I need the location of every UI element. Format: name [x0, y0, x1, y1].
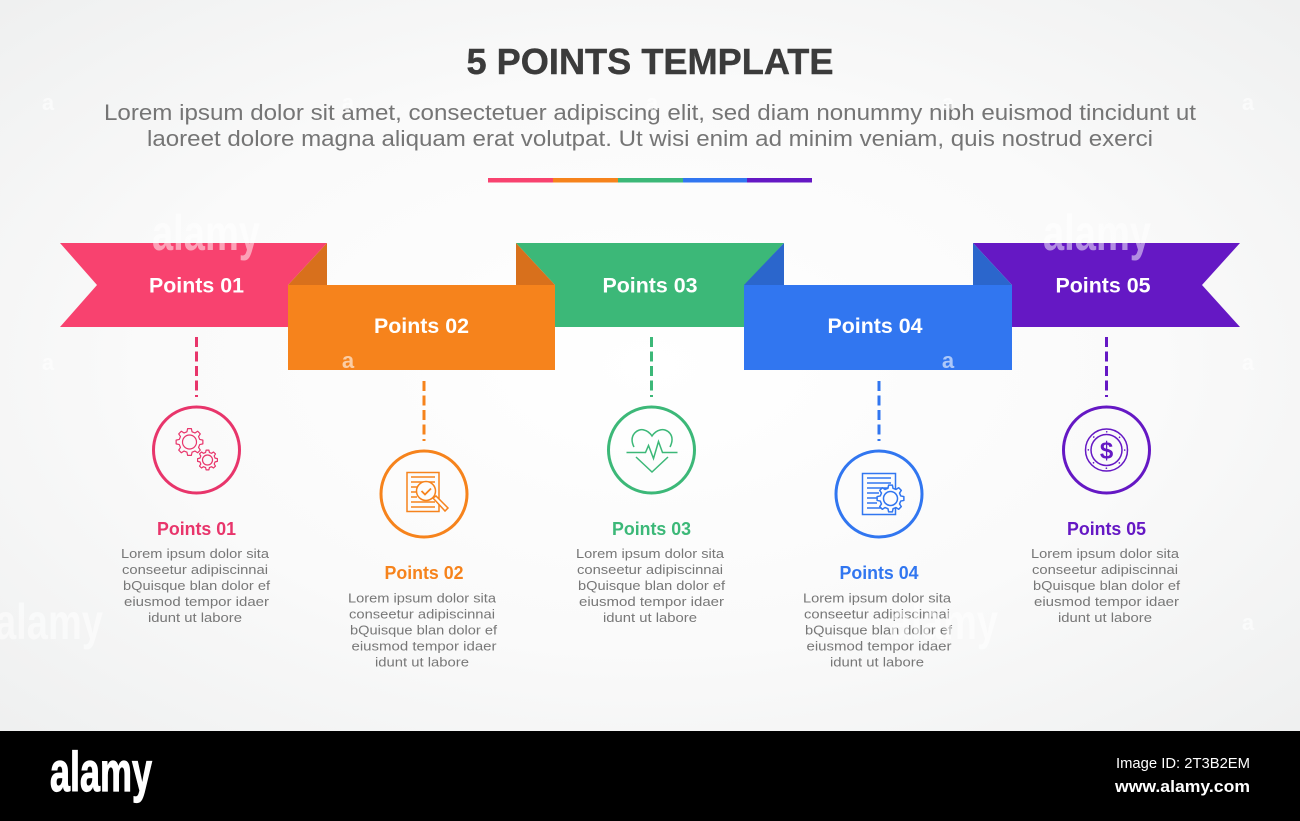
watermarks: a — [342, 90, 355, 115]
icon: document with magnifier — [407, 472, 448, 512]
fold 1-2 — [288, 243, 327, 285]
intro text: Lorem ipsum dolor sit amet, consectetuer adipiscing elit, sed diam nonummy nibh euismod tincidunt ut — [104, 100, 1196, 125]
ribbon label 2: Points 02 — [374, 315, 469, 338]
connector 1 — [195, 337, 198, 397]
text 1: Lorem ipsum dolor sita — [121, 546, 270, 561]
watermarks: a — [342, 348, 355, 373]
text 1: eiusmod tempor idaer — [124, 594, 270, 609]
heading 3: Points 03 — [612, 519, 691, 539]
ribbon banner — [60, 243, 1240, 370]
fold 2-3 — [516, 243, 555, 285]
column 5 — [1031, 337, 1180, 625]
text 3: bQuisque blan dolor ef — [578, 578, 725, 593]
text 3: Lorem ipsum dolor sita — [576, 546, 725, 561]
ribbon 5 — [973, 243, 1240, 327]
footer bar — [0, 731, 1300, 821]
icon: document with gear — [862, 474, 904, 514]
ribbon 2 — [288, 285, 555, 370]
title: 5 POINTS TEMPLATE — [466, 41, 834, 82]
circle 4 — [836, 451, 922, 537]
fold 4-5 — [973, 243, 1012, 285]
watermarks: a — [42, 90, 55, 115]
watermarks: a — [942, 348, 955, 373]
text 2: bQuisque blan dolor ef — [350, 622, 497, 638]
watermarks: alamy — [890, 594, 998, 650]
watermarks: a — [1242, 350, 1255, 375]
icon: gears — [176, 429, 217, 470]
text 5: Lorem ipsum dolor sita — [1031, 546, 1180, 561]
text 5 — [1031, 546, 1180, 625]
text 5: conseetur adipiscinnai — [1032, 562, 1178, 577]
text 4: conseetur adipiscinnai — [804, 606, 950, 622]
watermarks: a — [1242, 610, 1255, 635]
text 3: eiusmod tempor idaer — [579, 594, 725, 609]
text 1: idunt ut labore — [148, 610, 242, 625]
watermarks: a — [942, 90, 955, 115]
text 5: bQuisque blan dolor ef — [1033, 578, 1180, 593]
ribbon label 5: Points 05 — [1056, 274, 1151, 298]
text 4: bQuisque blan dolor ef — [805, 622, 952, 638]
column 1 — [121, 337, 270, 625]
watermarks: a — [1242, 90, 1255, 115]
ribbon label 1: Points 01 — [149, 274, 244, 298]
text 2 — [348, 590, 497, 670]
heading 5: Points 05 — [1067, 519, 1146, 539]
watermarks: alamy — [152, 205, 260, 261]
colour divider — [488, 178, 812, 182]
text 3 — [576, 546, 725, 625]
heading 1: Points 01 — [157, 519, 236, 539]
ribbon label 3: Points 03 — [602, 274, 698, 298]
text 2: conseetur adipiscinnai — [349, 606, 495, 622]
watermarks: a — [646, 90, 659, 115]
watermarks: alamy — [1043, 205, 1151, 261]
text 4 — [803, 590, 952, 670]
website: www.alamy.com — [1114, 777, 1250, 796]
icon: dollar coin: $ — [1100, 438, 1114, 464]
column 3 — [576, 337, 725, 625]
text 2: idunt ut labore — [375, 654, 469, 670]
image id: Image ID: 2T3B2EM — [1116, 755, 1250, 772]
connector 4 — [878, 381, 880, 441]
circle 2 — [381, 451, 467, 537]
column 4 — [803, 381, 952, 670]
text 5: eiusmod tempor idaer — [1034, 594, 1180, 609]
ribbon 4 — [744, 285, 1012, 370]
fold 3-4 — [744, 243, 784, 285]
connector 3 — [650, 337, 653, 397]
watermarks: a — [42, 350, 55, 375]
text 3: conseetur adipiscinnai — [577, 562, 723, 577]
text 2: eiusmod tempor idaer — [352, 638, 497, 654]
watermarks — [0, 90, 1255, 650]
connector 5 — [1105, 337, 1108, 397]
text 4: Lorem ipsum dolor sita — [803, 590, 952, 606]
heading 2: Points 02 — [384, 563, 464, 583]
intro text — [104, 100, 1196, 151]
footer logo: alamy — [50, 740, 152, 803]
icon: dollar coin — [1086, 429, 1128, 471]
icon: heart with pulse — [626, 430, 678, 472]
heading 4: Points 04 — [840, 563, 918, 583]
connector 2 — [422, 381, 426, 441]
ribbon 1 — [60, 243, 327, 327]
circle 3 — [608, 407, 694, 493]
text 4: eiusmod tempor idaer — [806, 638, 952, 654]
circle 1 — [154, 407, 240, 493]
intro text: laoreet dolore magna aliquam erat volutpat. Ut wisi enim ad minim veniam, quis nostrud exerci — [147, 126, 1153, 151]
text 3: idunt ut labore — [603, 610, 697, 625]
text 1: conseetur adipiscinnai — [122, 562, 268, 577]
column 2 — [348, 381, 497, 670]
text 1: bQuisque blan dolor ef — [123, 578, 270, 593]
ribbon 3 — [516, 243, 784, 327]
text 5: idunt ut labore — [1058, 610, 1152, 625]
text 2: Lorem ipsum dolor sita — [348, 590, 497, 606]
text 4: idunt ut labore — [830, 654, 924, 670]
ribbon label 4: Points 04 — [828, 315, 923, 338]
text 1 — [121, 546, 270, 625]
circle 5 — [1064, 407, 1150, 493]
